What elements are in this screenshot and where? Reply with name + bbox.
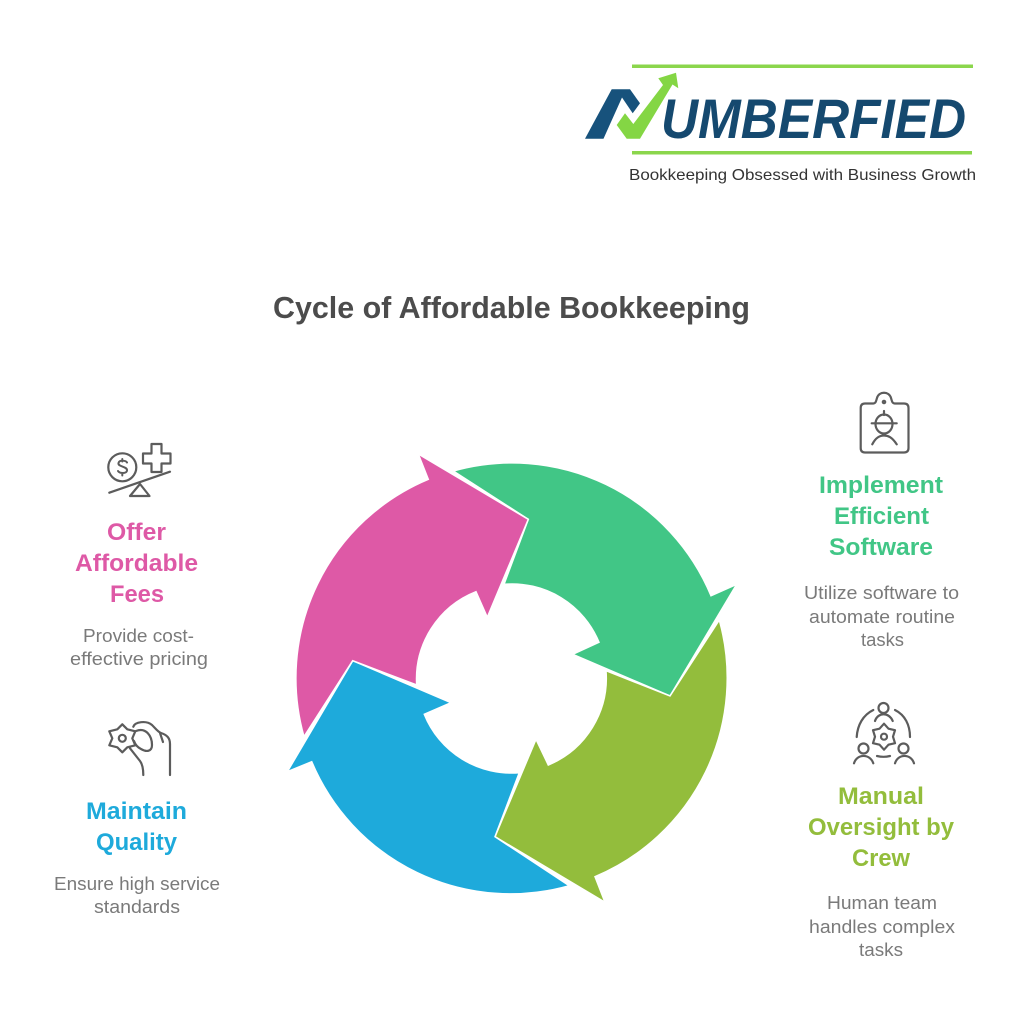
logo wordmark: UMBERFIED [661, 87, 966, 150]
heading [75, 519, 198, 608]
description [809, 893, 955, 960]
icon: team around gear [854, 703, 914, 763]
description [804, 583, 959, 650]
arrow: green [453, 463, 737, 696]
heading: Quality [96, 829, 178, 856]
panel: manual oversight by crew [808, 703, 955, 960]
cycle diagram [287, 454, 737, 902]
description: Provide cost- [83, 626, 194, 646]
title: Cycle of Affordable Bookkeeping [273, 290, 750, 325]
heading: Oversight by [808, 814, 955, 841]
panel: maintain quality [54, 722, 220, 917]
heading: Software [829, 534, 933, 561]
arrow: lime [495, 620, 727, 902]
panel: implement efficient software [804, 393, 959, 650]
description [54, 874, 220, 917]
icon: hand holding gear [109, 722, 170, 775]
icon: coin and cross on a balance [108, 444, 170, 496]
arrow: pink [296, 454, 528, 737]
description: automate routine [809, 607, 955, 627]
logo tagline: Bookkeeping Obsessed with Business Growth [629, 167, 976, 184]
heading [86, 798, 187, 856]
heading [808, 783, 955, 872]
heading: Manual [838, 783, 924, 810]
heading [819, 472, 943, 561]
description: Human team [827, 893, 937, 913]
description: handles complex [809, 917, 955, 937]
description: tasks [861, 630, 904, 650]
heading: Fees [110, 581, 164, 608]
description: Ensure high service [54, 874, 220, 894]
description: Utilize software to [804, 583, 959, 603]
description [70, 626, 208, 669]
logo mark: dark N stroke [585, 89, 640, 139]
heading: Efficient [834, 503, 929, 530]
arrow: blue [287, 661, 569, 894]
description: tasks [859, 940, 903, 960]
heading: Crew [852, 845, 910, 872]
description: effective pricing [70, 649, 208, 669]
heading: Maintain [86, 798, 187, 825]
heading: Offer [107, 519, 166, 546]
heading: Implement [819, 472, 943, 499]
heading: Affordable [75, 550, 198, 577]
icon: clipboard with worker [861, 393, 908, 452]
description: standards [94, 897, 180, 917]
logo: Numberfied [585, 64, 976, 184]
logo mark: green check arrow [617, 73, 678, 139]
panel: offer affordable fees [70, 444, 208, 669]
